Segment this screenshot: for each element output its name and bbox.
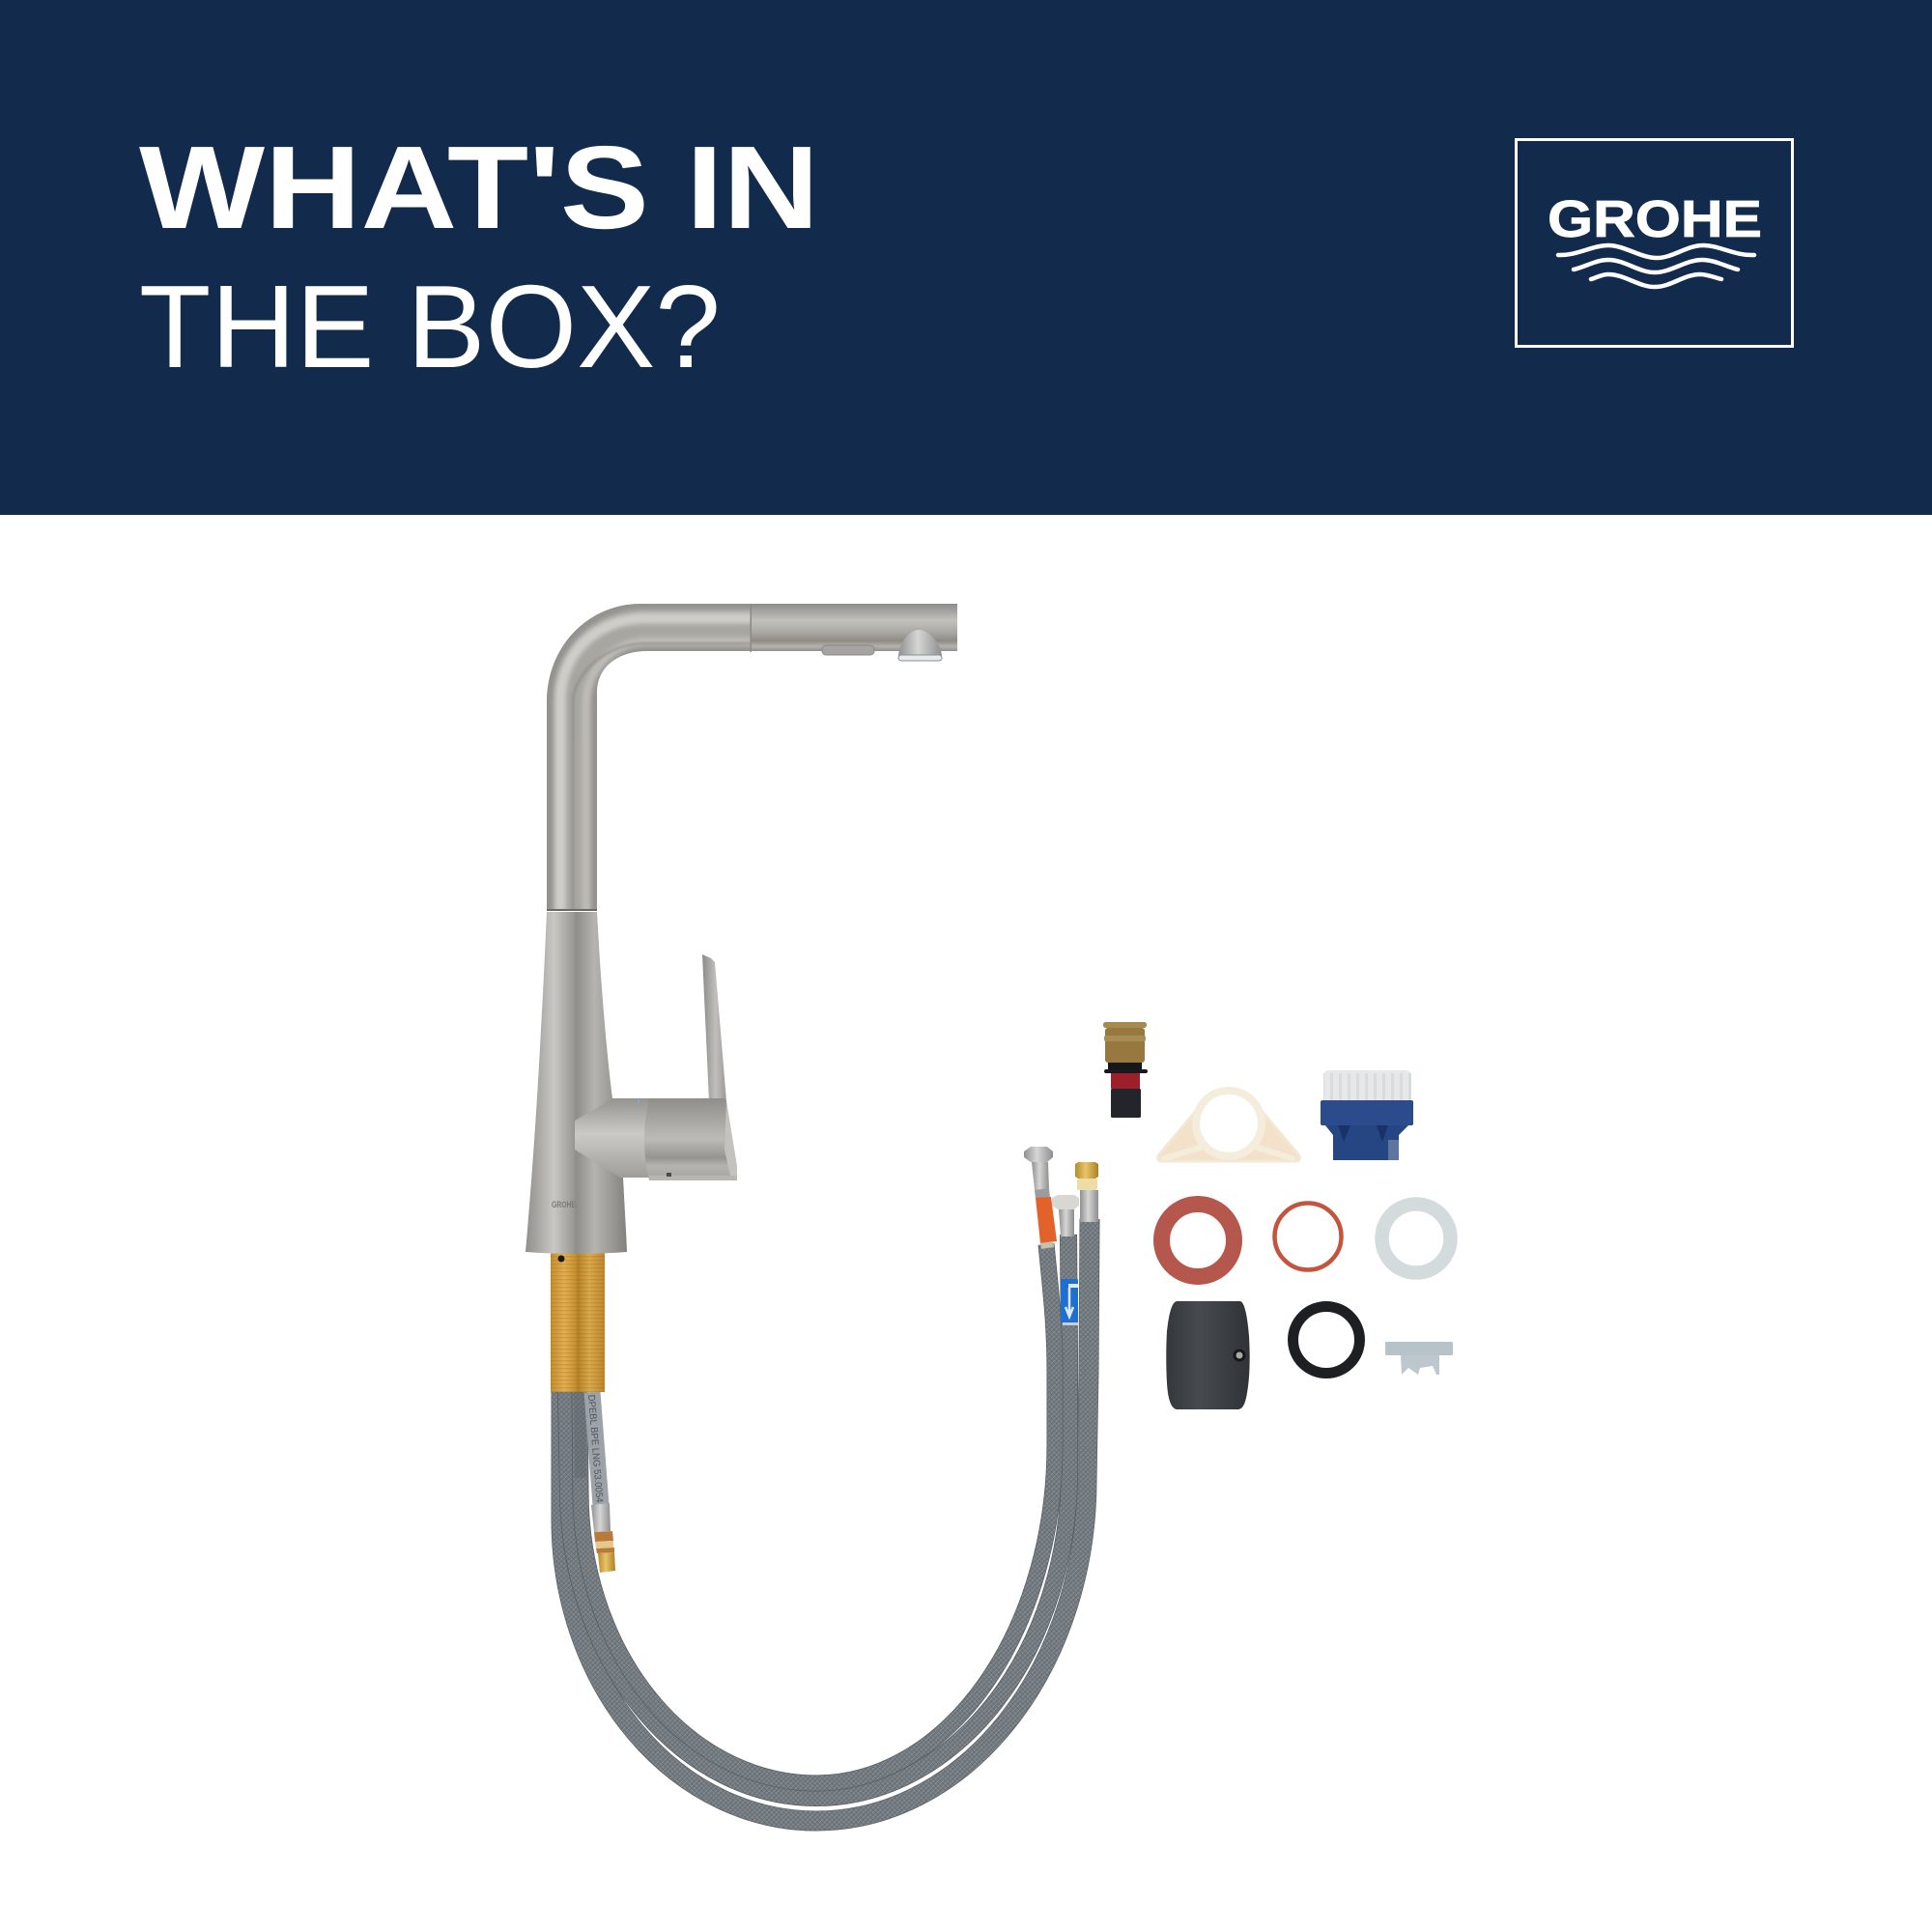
hose print: DPEBL BPE LNG 53.0054 bbox=[585, 1394, 605, 1503]
accessory: cream mounting bracket bbox=[1158, 1091, 1299, 1161]
title line: the box: THE BOX? bbox=[139, 261, 721, 392]
orange sleeve bbox=[1036, 1197, 1057, 1243]
fitting: orange-marked hose bbox=[1024, 1147, 1057, 1249]
accessory: black o-ring bbox=[1293, 1306, 1360, 1374]
brass threaded shank bbox=[551, 1252, 605, 1392]
hose end fitting bbox=[591, 1503, 615, 1573]
faucet body bbox=[526, 909, 627, 1254]
fitting: brass-nut hose bbox=[1075, 1162, 1098, 1222]
header band bbox=[0, 0, 1932, 515]
spray head bbox=[750, 604, 957, 661]
small grey pull-out hose bbox=[585, 1392, 615, 1573]
logo wordmark: GROHE bbox=[1548, 190, 1762, 248]
hose with blue tag bbox=[566, 1235, 1069, 1798]
accessory: grey clip bbox=[1385, 1342, 1453, 1375]
accessory: grey washer bbox=[1381, 1204, 1451, 1273]
bracket ring bbox=[1196, 1091, 1262, 1156]
blue tag bbox=[1061, 1279, 1078, 1325]
aerator nozzle bbox=[898, 630, 942, 661]
hoses bbox=[561, 1219, 1090, 1821]
accessory: thin red ring bbox=[1275, 1204, 1341, 1269]
clamp screw bbox=[1233, 1349, 1246, 1362]
title line: what's in: WHAT'S IN bbox=[139, 122, 819, 253]
lever handle blade bbox=[702, 954, 726, 1101]
accessory: quick connector bbox=[1103, 1022, 1148, 1118]
hose with orange tag bbox=[580, 1244, 1055, 1783]
logo frame bbox=[1517, 139, 1793, 346]
logo: GROHE bbox=[1517, 139, 1793, 346]
bracket hole bbox=[1200, 1094, 1258, 1152]
spray button bbox=[822, 645, 874, 655]
logo waves bbox=[1558, 245, 1754, 287]
accessory: red washer bbox=[1161, 1204, 1235, 1277]
supply hose fittings bbox=[1024, 1147, 1098, 1325]
faucet bbox=[526, 599, 957, 1392]
blue indicator bbox=[638, 1099, 639, 1105]
pull-out spout tube bbox=[547, 604, 751, 909]
accessory: blue and white cap bbox=[1321, 1070, 1413, 1160]
neck bbox=[575, 1098, 649, 1178]
handle cylinder bbox=[638, 1098, 737, 1180]
body logo: GROHE bbox=[552, 1200, 576, 1209]
accessory: black clamp barrel bbox=[1166, 1301, 1250, 1409]
collar seam bbox=[547, 909, 597, 911]
fitting: blue-marked hose bbox=[1052, 1195, 1079, 1325]
hose with brass fitting bbox=[561, 1219, 1090, 1821]
set-screw hole bbox=[558, 1256, 564, 1262]
title bbox=[139, 122, 819, 392]
